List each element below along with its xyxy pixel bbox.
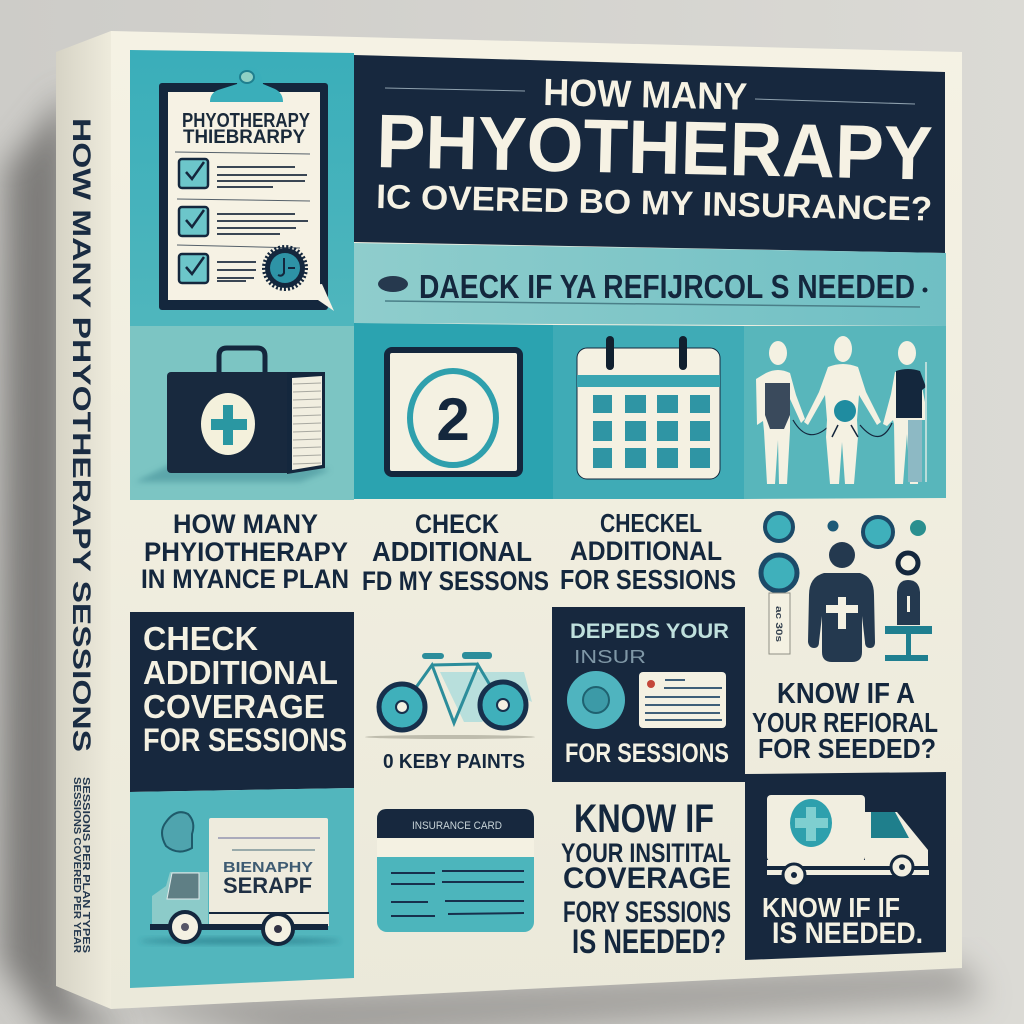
icon: calendar xyxy=(577,336,720,479)
icon: three human figures xyxy=(756,336,926,484)
text block: column 1: HOW MANY xyxy=(173,509,318,539)
spine small print: SESSIONS COVERED PER YEAR xyxy=(71,777,82,954)
text block: know if a referral: YOUR REFIORAL xyxy=(752,707,938,738)
icon: bicycle xyxy=(365,652,535,739)
panel: icon row teal xyxy=(130,323,946,500)
text block: know if your hospital coverage: YOUR INSITITAL xyxy=(561,838,731,868)
panel: referral strip: DAECK IF YA REFIJRCOL S NEEDED xyxy=(419,268,915,305)
text block: know if your hospital coverage: FORY SESSIONS xyxy=(563,896,731,929)
panel: check additional coverage: ADDITIONAL xyxy=(143,654,338,691)
panel: know if is needed: IS NEEDED. xyxy=(772,917,923,950)
panel: check additional coverage: CHECK xyxy=(143,620,258,657)
icon: small marker xyxy=(378,276,408,292)
text block: column 3: CHECKEL xyxy=(600,508,702,538)
spine small print xyxy=(71,777,91,954)
text block: know if your hospital coverage xyxy=(561,797,731,961)
book cover xyxy=(111,31,962,1009)
icon: delivery truck xyxy=(140,812,340,944)
panel: check additional coverage: COVERAGE xyxy=(143,688,325,725)
panel: main title: PHYOTHERAPY xyxy=(376,99,933,197)
icon: insurance card xyxy=(377,809,534,932)
panel: know if is needed xyxy=(745,772,946,960)
icon: ambulance van xyxy=(767,795,929,886)
spine title: HOW MANY PHYOTHERAPY SESSIONS xyxy=(67,118,95,752)
icon: delivery truck: SERAPF xyxy=(223,873,312,898)
panel: check additional coverage xyxy=(130,612,354,792)
icon: delivery truck: BIENAPHY xyxy=(223,859,313,876)
icon: ear-shaped swirl xyxy=(162,812,193,852)
spine small print: SESSIONS PER PLAN TYPES xyxy=(80,777,91,953)
panel: main title xyxy=(354,55,945,253)
panel: clipboard teal xyxy=(130,50,354,326)
text block: know if a referral xyxy=(752,678,938,764)
text block: know if your hospital coverage: COVERAGE xyxy=(563,862,731,895)
icon: insurance card: INSURANCE CARD xyxy=(412,820,502,832)
panel: depends on your insurance: FOR SESSIONS xyxy=(565,738,729,768)
text block: column 3 xyxy=(560,508,736,595)
panel: check additional coverage: FOR SESSIONS xyxy=(143,722,347,758)
text block: column 1 xyxy=(141,509,349,594)
icon: clipboard: PHYOTHERAPY xyxy=(182,110,311,132)
icon group: patient with medical cross xyxy=(761,513,932,662)
text block: know if a referral: FOR SEEDED? xyxy=(758,733,936,764)
panel: van teal xyxy=(130,788,354,988)
icon: clipboard xyxy=(159,67,334,311)
panel: main title: HOW MANY xyxy=(543,72,748,119)
text block: column 3: ADDITIONAL xyxy=(570,536,722,566)
text block: column 3: FOR SESSIONS xyxy=(560,564,736,595)
icon: number dial: 2 xyxy=(436,386,470,453)
panel: depends on your insurance: DEPEDS YOUR xyxy=(570,620,729,643)
panel: depends on your insurance xyxy=(552,607,745,782)
text block: column 2: ADDITIONAL xyxy=(372,536,532,567)
icon: first aid briefcase xyxy=(135,348,330,482)
panel: referral strip xyxy=(354,243,946,326)
panel: know if is needed: KNOW IF IF xyxy=(762,892,900,923)
text block: column 2: FD MY SESSONS xyxy=(362,566,549,596)
panel: main title: IC OVERED BO MY INSURANCE? xyxy=(376,178,933,229)
panel: depends on your insurance: INSUR xyxy=(574,647,646,667)
text block: know if your hospital coverage: KNOW IF xyxy=(574,797,714,841)
text block: column 2 xyxy=(362,509,549,596)
text block: know if a referral: KNOW IF A xyxy=(777,678,915,710)
text block: column 2: CHECK xyxy=(415,509,499,539)
caption: key points: 0 KEBY PAINTS xyxy=(383,751,525,773)
text block: column 1: PHYIOTHERAPY xyxy=(144,537,348,567)
text block: know if your hospital coverage: IS NEEDED? xyxy=(572,923,726,961)
icon group: patient with medical cross: ac 30s xyxy=(774,606,784,642)
icon: number dial xyxy=(387,350,520,474)
text block: column 1: IN MYANCE PLAN xyxy=(141,564,349,594)
icon: clipboard: THIEBRARPY xyxy=(183,127,305,148)
book spine xyxy=(56,31,111,1009)
